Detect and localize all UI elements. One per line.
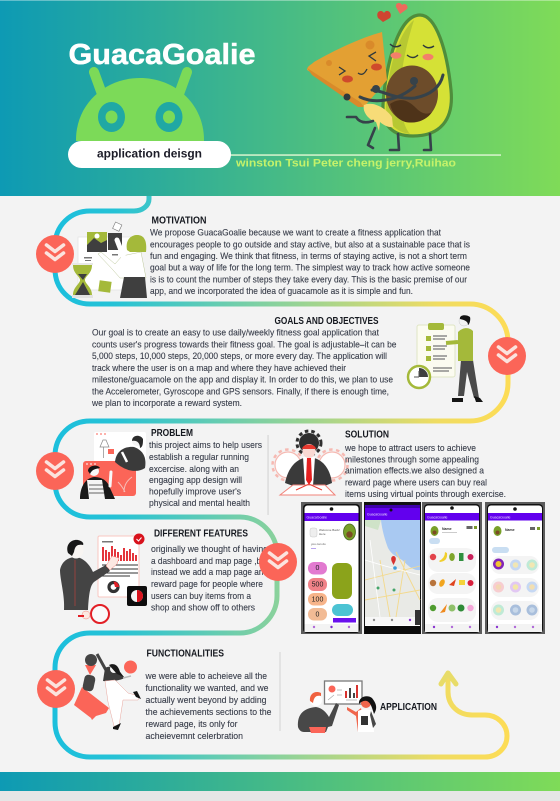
badge: goals chevrons xyxy=(488,337,526,375)
phone: dashboard screen: you can do xyxy=(311,542,326,546)
text: functionalities: acheievemnt celerbration xyxy=(146,731,243,741)
text: different features: originally we thought of having xyxy=(151,544,268,554)
text: problem: physical and mental health xyxy=(149,498,250,508)
badge: features chevrons xyxy=(259,543,297,581)
text: functionalities: the achievements sections to the xyxy=(146,707,272,717)
heading: problem: PROBLEM xyxy=(151,428,193,439)
phone: dashboard screen: Here xyxy=(319,532,326,536)
heading: application: APPLICATION xyxy=(380,702,437,713)
text: solution: reward page where users can buy real xyxy=(345,478,487,488)
phone: rewards shop screen: GuacaGoalie xyxy=(427,516,447,520)
text: motivation: encourages people to go outside and stay active, but also at a sustainable pace that is xyxy=(150,239,470,249)
phone: dashboard screen: GuacaGoalie xyxy=(306,516,327,520)
header band xyxy=(0,0,560,196)
text: goals: milestone/guacamole on the app and display it. In order to do this, we plan to use xyxy=(92,375,393,385)
text: goals: 5,000 steps, 10,000 steps, 20,000 steps, or more every day. The application will xyxy=(92,351,387,361)
text: functionalities: functionality we wanted, and we xyxy=(146,683,268,693)
authors: winston Tsui Peter cheng jerry,Ruihao xyxy=(235,158,456,170)
text: problem: hopefully improve user's xyxy=(149,486,241,496)
phone: rewards shop screen xyxy=(422,502,482,634)
heading: goals and objectives: GOALS AND OBJECTIVES xyxy=(274,316,379,327)
text: goals: Our goal is to create an easy to use daily/weekly fitness goal application that xyxy=(92,328,379,338)
footer band xyxy=(0,772,560,801)
text: goals: the Accelerometer, Gyroscope and GPS sensors. Finally, if there is enough time, xyxy=(92,386,389,396)
subtitle pill xyxy=(68,141,231,168)
text: different features: shop and show off to others xyxy=(151,602,255,612)
heading: different features: DIFFERENT FEATURES xyxy=(154,528,248,540)
text: different features xyxy=(151,544,268,612)
text: problem: this project aims to help users xyxy=(149,440,262,450)
badge: motivation chevrons xyxy=(36,235,74,273)
text: motivation xyxy=(150,228,470,296)
phone: dashboard screen: 0 xyxy=(316,612,320,618)
phone: dashboard screen: 500 xyxy=(312,582,323,588)
heading: solution: SOLUTION xyxy=(345,430,389,440)
text: goals xyxy=(91,328,396,408)
text: functionalities xyxy=(145,671,272,741)
illustration: functionalities woman with shapes xyxy=(74,654,141,730)
badge: functionalities chevrons xyxy=(37,670,75,708)
text: different features: users can buy items from a xyxy=(151,591,252,601)
timeline: winding path with arrow xyxy=(55,196,508,757)
phone: map screen xyxy=(364,502,421,634)
illustration: avocado hugging nacho xyxy=(307,3,451,150)
text: solution: we hope to attract users to achieve xyxy=(344,443,476,453)
text: different features: reward page for people where xyxy=(151,579,263,589)
phone: achievements screen: GuacaGoalie xyxy=(490,516,510,520)
text: motivation: app, and we incorporated the idea of guacamole as it is simple and fun. xyxy=(150,286,413,296)
text: solution xyxy=(344,443,506,499)
text: goals: counts user's progress towards their fitness goal. The goal is adjustable–it can be xyxy=(92,339,396,349)
text: motivation: We propose GuacaGoalie because we want to create a fitness application that xyxy=(150,228,441,238)
phone: dashboard screen xyxy=(301,502,362,634)
divider xyxy=(279,652,281,731)
illustration: problem video call xyxy=(80,432,146,499)
text: different features: instead we add a map page and xyxy=(151,567,268,577)
text: functionalities: reward page, its only for xyxy=(146,719,238,729)
phone: rewards shop screen: Name xyxy=(442,527,452,531)
badge: problem chevrons xyxy=(36,452,74,490)
divider line under header xyxy=(228,154,501,156)
text: motivation: fun and engaging. We think that fitness, in terms of staying active, is not a short term xyxy=(150,251,467,261)
phone: achievements screen: Name xyxy=(505,528,515,532)
text: solution: milestones through some appealing xyxy=(345,454,479,464)
heading: functionalities: FUNCTIONALITIES xyxy=(146,648,224,660)
text: motivation: goal but a way of life for the long term. The simplest way to track how active someone xyxy=(150,263,470,273)
text: problem: excercise. along with an xyxy=(149,464,239,474)
text: problem: engaging app design will xyxy=(149,475,242,485)
text: functionalities: actually went beyond by adding xyxy=(146,695,266,705)
divider xyxy=(267,435,269,515)
icon: android mascot xyxy=(76,72,204,141)
illustration: different features presenter xyxy=(60,534,147,623)
text: motivation: is is to count the number of steps they take every day. This is the basic premise of our xyxy=(150,274,467,284)
title: GuacaGoalie xyxy=(68,39,256,71)
text: functionalities: we were able to acheieve all the xyxy=(145,671,267,681)
phone: dashboard screen: 0 xyxy=(316,565,320,572)
phone: dashboard screen: Welcome Back! xyxy=(319,528,340,532)
illustration: goals checklist man xyxy=(408,315,483,402)
heading: motivation: MOTIVATION xyxy=(152,216,206,226)
illustration: application presenters xyxy=(298,681,376,733)
phone: dashboard screen: 100 xyxy=(312,596,323,604)
text: solution: items using virtual points through exercise. xyxy=(345,489,506,499)
illustration: motivation xyxy=(72,222,147,298)
text: solution: animation effects.we also designed a xyxy=(345,466,485,476)
text: goals: we plan to incorporate a reward system. xyxy=(91,398,242,408)
text: problem: establish a regular running xyxy=(149,452,249,462)
text: different features: a dashboard and map page ,but xyxy=(151,556,268,566)
phone: map screen: GuacaGoalie xyxy=(367,512,387,516)
phone: achievements screen xyxy=(485,502,545,634)
text: goals: track where the user is on a map and where they have achieved their xyxy=(92,363,346,373)
subtitle pill: application deisgn xyxy=(97,148,202,160)
text: problem xyxy=(149,440,262,508)
illustration: solution gears man xyxy=(272,431,348,495)
